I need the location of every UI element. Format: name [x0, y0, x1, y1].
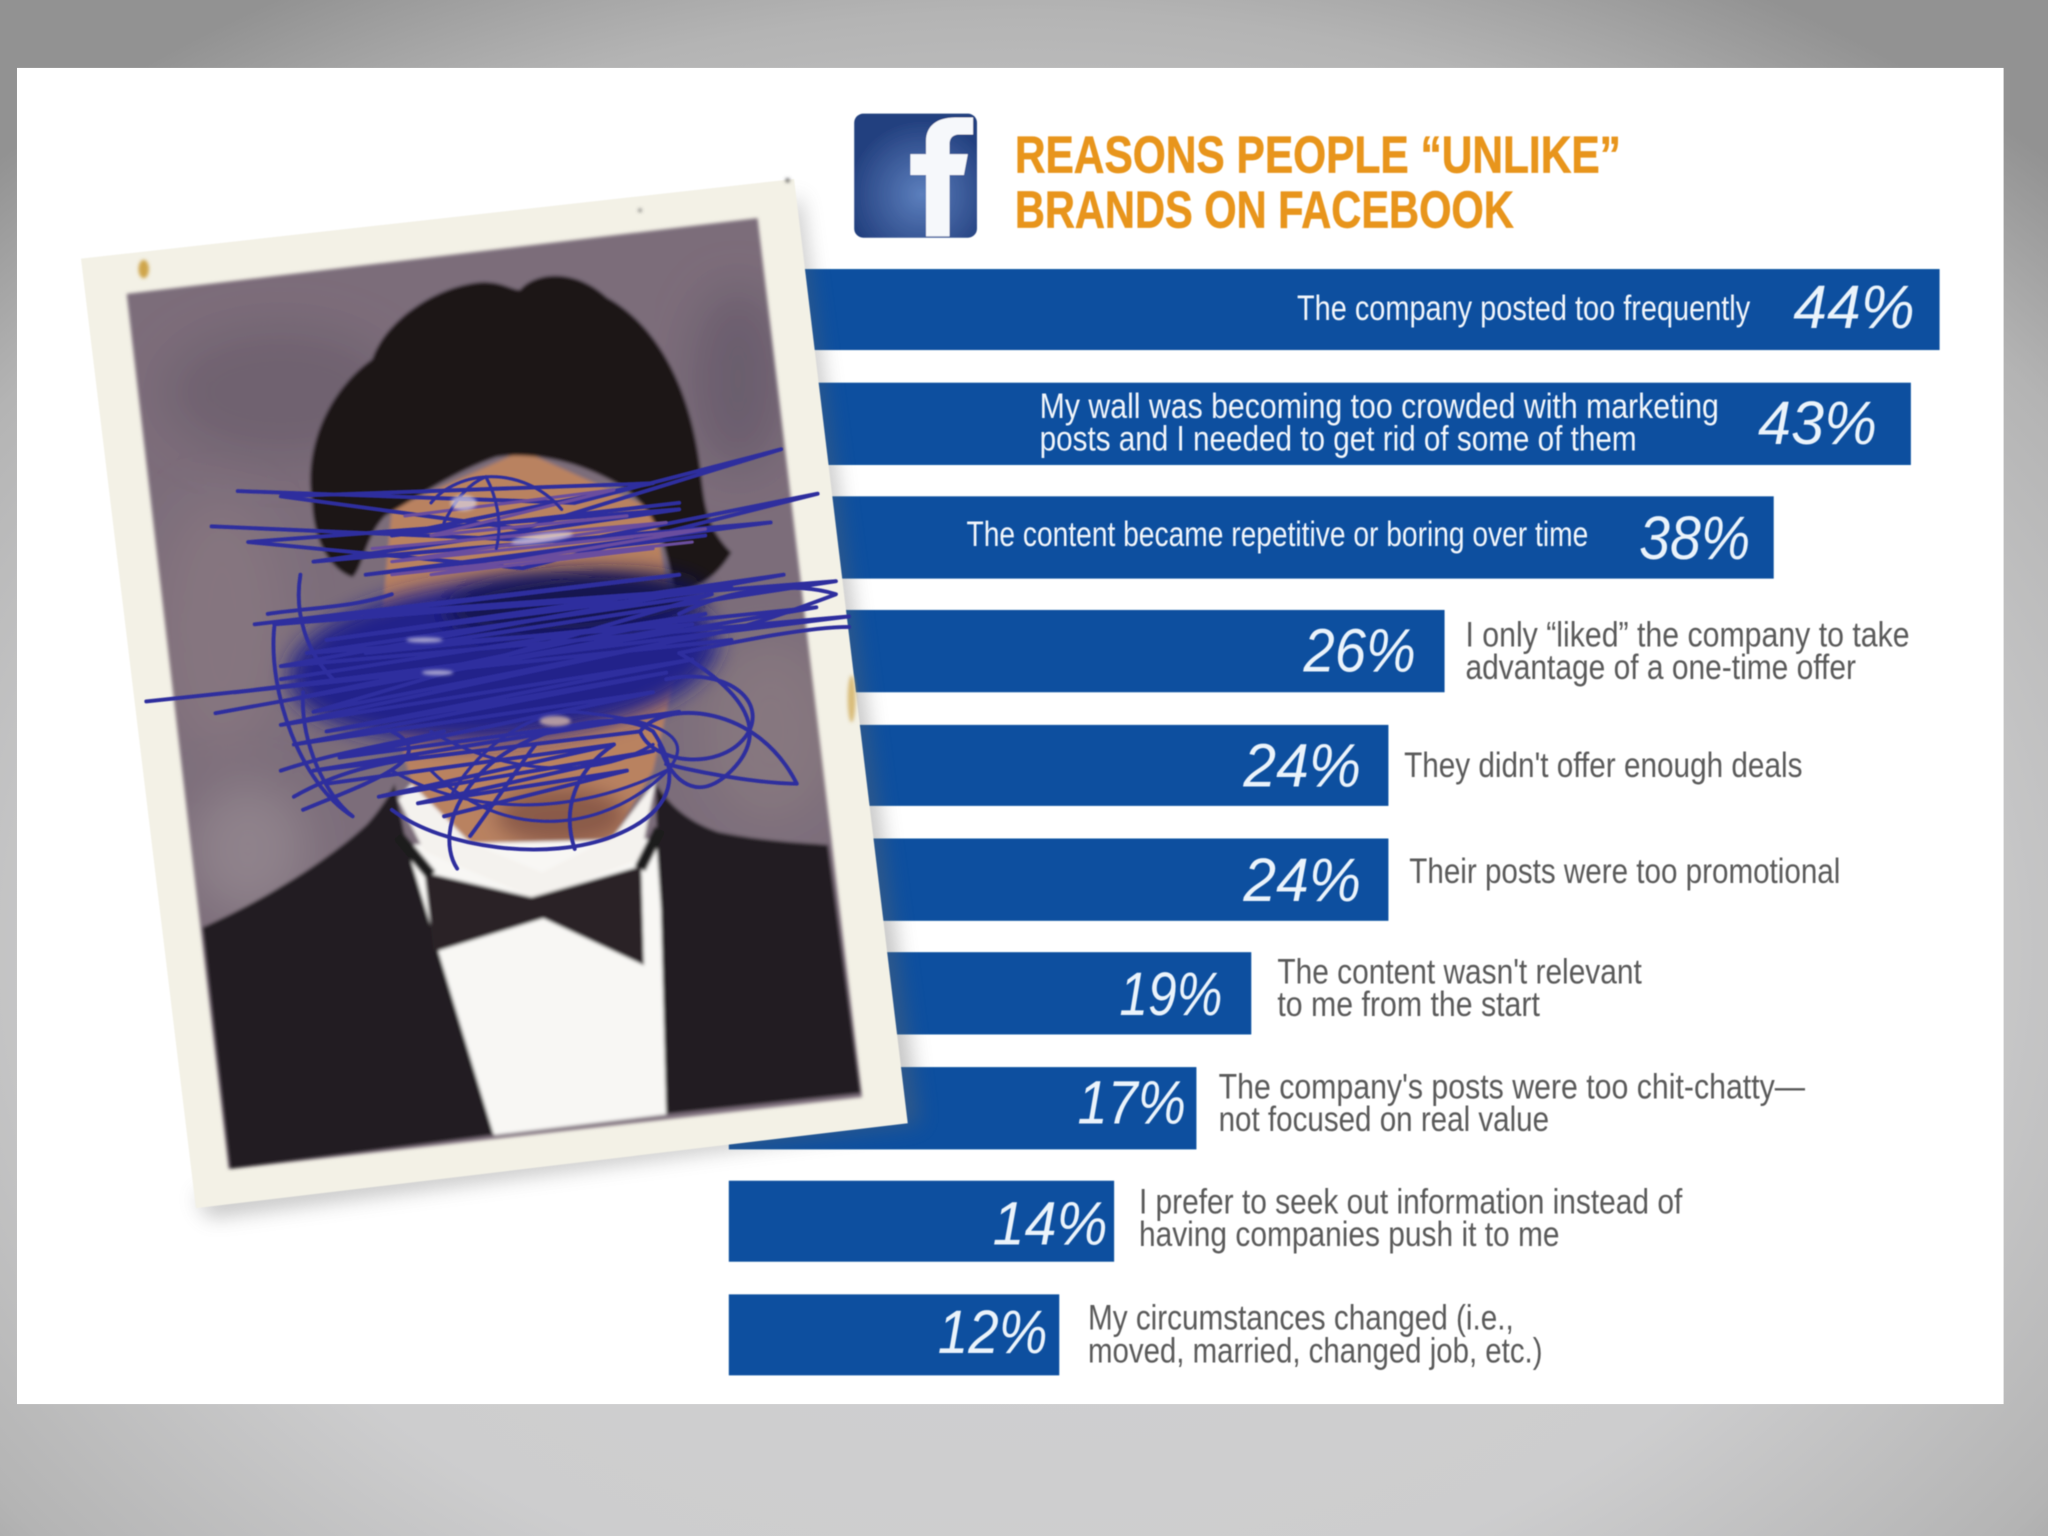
percentages: 26%	[1303, 616, 1416, 685]
bar labels beside bars: moved, married, changed job, etc.)	[1088, 1331, 1543, 1370]
tuxedo left	[202, 784, 494, 1169]
bar chart	[729, 269, 1940, 1375]
bar labels beside bars: advantage of a one-time offer	[1465, 648, 1856, 687]
portrait photo	[127, 218, 862, 1169]
percentages: 19%	[1119, 960, 1223, 1029]
bar labels beside bars: I only “liked” the company to take	[1465, 616, 1910, 655]
bar labels beside bars: not focused on real value	[1219, 1100, 1549, 1139]
percentages: 38%	[1639, 504, 1750, 573]
percentages: 44%	[1793, 273, 1915, 342]
bow tie	[424, 866, 644, 965]
scribble	[146, 449, 849, 869]
bar labels beside bars: The content wasn't relevant	[1277, 953, 1642, 992]
title: BRANDS ON FACEBOOK	[1015, 181, 1514, 239]
paper stains	[138, 178, 856, 722]
bar labels inside bars	[967, 289, 1751, 554]
bar labels beside bars	[1088, 616, 1910, 1370]
bar labels inside bars: My wall was becoming too crowded with marketing	[1040, 387, 1719, 426]
percentages	[938, 273, 1915, 1367]
photo card with scribbled face	[81, 178, 920, 1217]
tuxedo right	[656, 784, 861, 1114]
scribble highlights	[406, 495, 574, 726]
shirt	[394, 839, 669, 1135]
bar labels inside bars: The content became repetitive or boring over time	[967, 515, 1588, 554]
percentages: 24%	[1242, 731, 1361, 800]
card shadow	[196, 196, 920, 1217]
percentages: 24%	[1242, 846, 1361, 915]
percentages: 43%	[1758, 389, 1877, 458]
hair	[310, 276, 731, 590]
collar	[396, 780, 658, 846]
bar labels beside bars: I prefer to seek out information instead of	[1139, 1182, 1682, 1221]
percentages: 14%	[993, 1190, 1108, 1259]
title	[1015, 126, 1621, 239]
icon: facebook logo	[854, 114, 977, 238]
bar labels inside bars: The company posted too frequently	[1297, 289, 1751, 328]
bar labels beside bars: The company's posts were too chit-chatty—	[1219, 1067, 1806, 1106]
title: REASONS PEOPLE “UNLIKE”	[1015, 126, 1621, 184]
bar labels beside bars: to me from the start	[1277, 985, 1540, 1024]
percentages: 12%	[938, 1298, 1048, 1367]
bar labels beside bars: My circumstances changed (i.e.,	[1088, 1299, 1514, 1338]
face	[382, 452, 672, 844]
bar labels beside bars: having companies push it to me	[1139, 1215, 1560, 1254]
bar labels beside bars: Their posts were too promotional	[1409, 852, 1840, 891]
bar labels inside bars: posts and I needed to get rid of some of them	[1040, 420, 1637, 459]
percentages: 17%	[1078, 1068, 1186, 1137]
bar labels beside bars: They didn't offer enough deals	[1404, 746, 1802, 785]
card paper	[81, 179, 908, 1208]
